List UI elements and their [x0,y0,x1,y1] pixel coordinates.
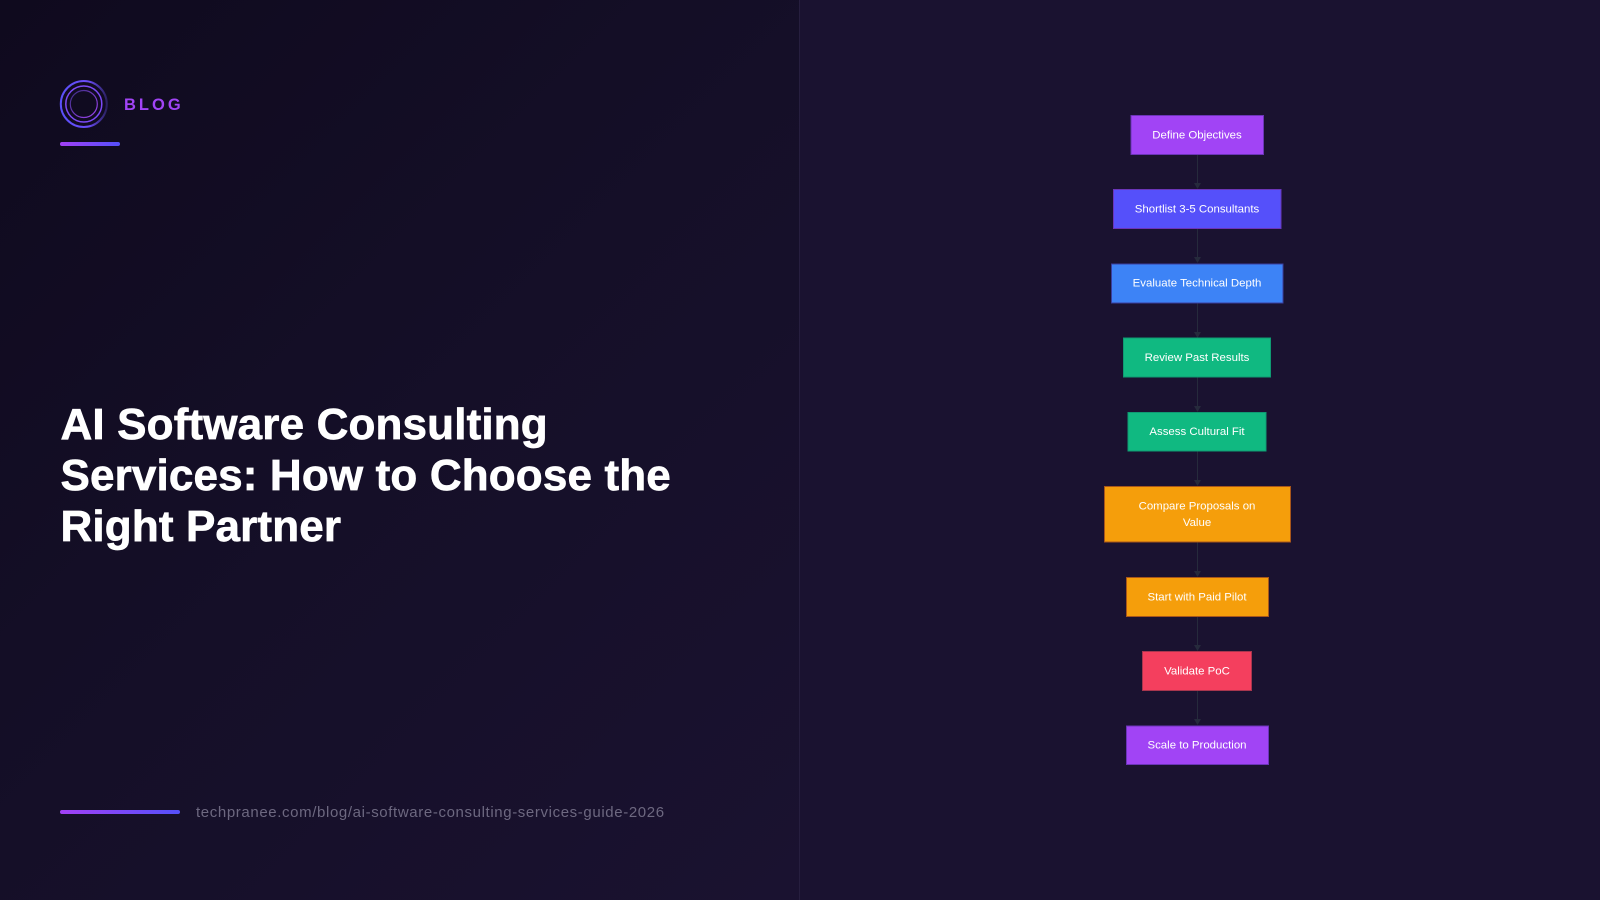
arrow: review to assess [1194,377,1201,412]
step: Pilot: Start with Paid Pilot [1147,592,1247,604]
step: Review: Review Past Results [1145,352,1250,364]
step: Assess: Assess Cultural Fit [1149,426,1245,438]
left panel [0,0,800,900]
step: Evaluate: Evaluate Technical Depth [1133,278,1261,290]
step: Compare: Compare Proposals on [1139,501,1255,513]
arrow: shortlist to evaluate [1194,229,1201,263]
step: Shortlist [1114,190,1281,228]
accent bar [60,142,120,146]
title [60,400,671,551]
step: Pilot [1126,578,1268,616]
panel: flowchart [800,0,1600,900]
source url: techpranee.com/blog/ai-software-consulting-services-guide-2026 [196,804,665,821]
step: Validate [1142,652,1252,690]
arrow: evaluate to review [1194,303,1201,338]
arrow: define to shortlist [1194,155,1201,189]
footer accent bar [60,810,180,814]
step: Define Objectives [1131,116,1264,154]
step: Compare [1104,486,1290,542]
arrow: validate to scale [1194,691,1201,725]
arrow: assess to compare [1194,451,1201,486]
arrow: compare to pilot [1194,542,1201,577]
step: Shortlist: Shortlist 3-5 Consultants [1135,204,1260,216]
step: Scale [1126,726,1268,764]
step: Evaluate [1112,264,1283,303]
step: Define Objectives: Define Objectives [1152,130,1242,142]
step: Assess [1128,412,1266,451]
step: Compare: Value [1183,517,1211,529]
title: AI Software Consulting [60,400,548,449]
step: Scale: Scale to Production [1147,740,1247,752]
title: Services: How to Choose the [60,451,671,500]
icon: concentric ring logo [60,80,108,128]
step: Review [1124,338,1270,377]
label: blog: BLOG [124,96,184,114]
arrow: pilot to validate [1194,616,1201,651]
title: Right Partner [60,502,341,551]
step: Validate: Validate PoC [1164,666,1230,678]
